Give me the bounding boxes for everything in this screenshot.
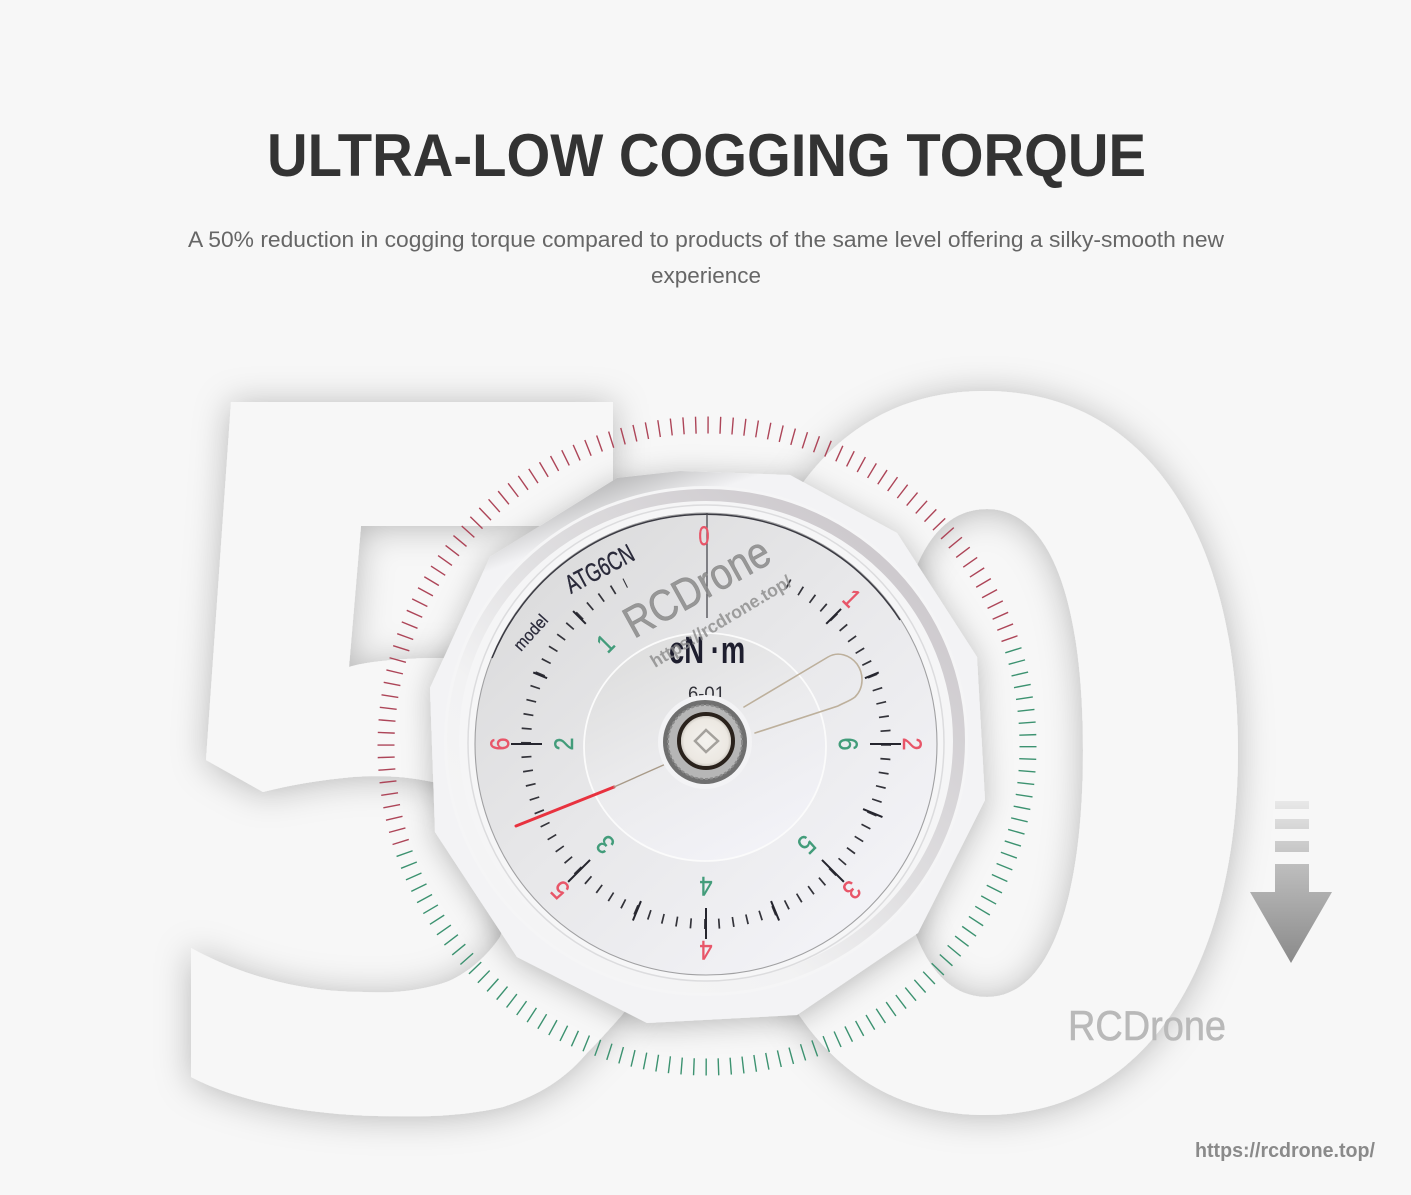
inner disc	[584, 633, 826, 861]
red outer scale numbers: 6	[485, 738, 515, 750]
red outer scale numbers: 3	[836, 874, 867, 905]
model label: model	[510, 611, 552, 655]
dial face	[475, 513, 937, 975]
green inner scale numbers	[549, 629, 863, 901]
range label: 6-01	[688, 684, 725, 705]
subtitle text block: experience	[651, 263, 761, 288]
unit label: cN	[669, 630, 704, 672]
top dark arc	[492, 514, 900, 658]
centre hub screw	[658, 695, 752, 789]
red outer scale numbers: 2	[897, 738, 927, 750]
dial watermark	[615, 527, 795, 671]
green inner scale numbers: 5	[791, 829, 822, 860]
icon: down arrow	[1250, 801, 1332, 963]
red outer scale numbers: 5	[545, 874, 576, 905]
red outer scale numbers: 4	[700, 935, 712, 965]
subtitle text block	[188, 227, 1224, 288]
big numeral 0	[732, 391, 1238, 1115]
green inner scale numbers: 6	[833, 738, 863, 750]
minor scale ticks	[526, 583, 886, 924]
green inner scale numbers: 1	[591, 629, 620, 658]
site url: https://rcdrone.top/	[1195, 1140, 1375, 1162]
outer ring	[444, 486, 968, 996]
red outer scale numbers: 0	[698, 521, 710, 551]
ATG6CN label: ATG6CN	[560, 538, 639, 599]
watermark RCDrone: RCDrone	[615, 527, 779, 648]
red outer scale numbers: 1	[837, 583, 867, 613]
green inner scale numbers: 2	[549, 738, 579, 750]
subtitle text block: A 50% reduction in cogging torque compared to products of the same level offering a silky-smooth new	[188, 227, 1224, 252]
major scale ticks	[511, 609, 901, 939]
big numeral 5	[191, 402, 656, 1116]
green inner scale numbers: 3	[590, 829, 621, 860]
red ticks arc	[378, 416, 1018, 846]
unit label: ·	[711, 630, 720, 672]
gauge body polygon	[430, 471, 985, 1023]
unit label: m	[721, 630, 745, 672]
red outer scale numbers	[485, 521, 927, 965]
watermark url: https://rcdrone.top/	[647, 571, 795, 671]
zero hairline	[706, 513, 708, 618]
brand watermark: RCDrone	[1068, 1002, 1226, 1049]
green inner scale numbers: 4	[700, 871, 712, 901]
needle: red pointer and wire loop	[516, 654, 862, 826]
tick ring: red and green arcs	[386, 425, 1028, 1067]
torque gauge dial	[430, 471, 985, 1023]
green ticks arc	[396, 647, 1036, 1076]
title: ULTRA-LOW COGGING TORQUE	[267, 122, 1146, 189]
